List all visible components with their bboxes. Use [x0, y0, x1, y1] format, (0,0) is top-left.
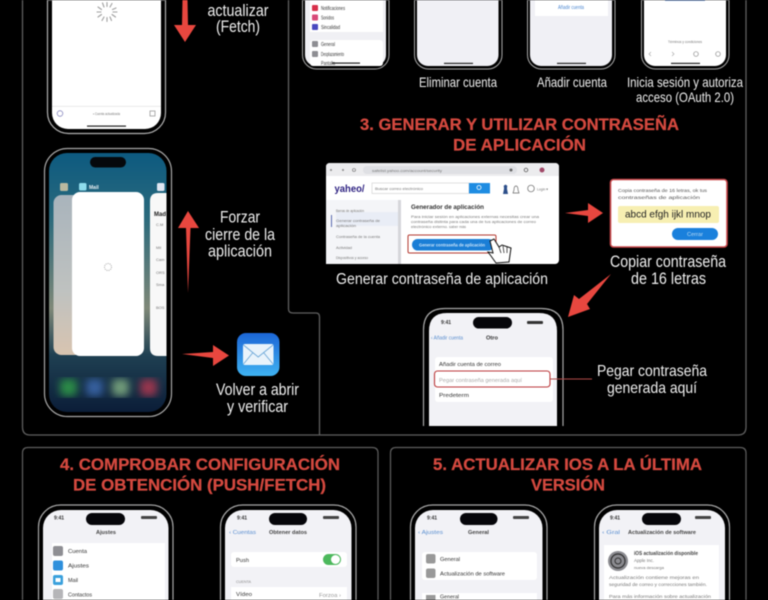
- update card: Actualización contiene mejoras en: [609, 575, 700, 580]
- app labels above the cards: [60, 183, 164, 191]
- app labels above the cards: Mail: [89, 185, 99, 191]
- update card: seguridad de correo y correcciones también.: [609, 582, 707, 587]
- arrow: to copy dialog: [565, 203, 603, 223]
- account row: Vídeo: [236, 592, 252, 598]
- settings rows: Mail: [68, 578, 78, 584]
- right app card with mail list: Sma: [156, 282, 165, 287]
- phone: app switcher: [44, 148, 172, 416]
- phone: remove account: [414, 0, 502, 69]
- label: actualizar (Fetch): actualizar: [208, 2, 269, 20]
- phone: settings: [38, 505, 173, 600]
- general rows: [422, 552, 537, 600]
- 16-letter password: abcd efgh ijkl mnop: [625, 208, 711, 220]
- phone: add account: Añadir cuenta: [558, 5, 585, 11]
- panel: copy password dialog: Copia contraseña de 16 letras, ok tus: [618, 188, 708, 193]
- centre app card with spinner: [72, 192, 144, 356]
- sidebar: Contraseña de la cuenta: [336, 234, 381, 239]
- heading: section 3: DE APLICACIÓN: [453, 136, 586, 154]
- navigation bar: Otro: [486, 336, 499, 342]
- search box: [372, 183, 490, 194]
- heading: section 3: [360, 114, 679, 154]
- phone: settings list: Notificaciones: [321, 6, 345, 12]
- icon: loading spinner: [97, 2, 117, 22]
- heading: section 4: [60, 455, 340, 494]
- account row: Forzoa ›: [319, 593, 341, 599]
- heading: section 4: 4. COMPROBAR CONFIGURACIÓN: [60, 455, 340, 474]
- label: Copiar contraseña de 16 letras: [610, 253, 727, 288]
- update card: [604, 545, 719, 600]
- search box: Buscar correo electrónico: [375, 186, 424, 191]
- close button: Cerrar: [687, 232, 703, 238]
- arrow: to paste field: [568, 274, 611, 317]
- label: Volver a abrir y verificar: [216, 381, 299, 416]
- label: Volver a abrir y verificar: y verificar: [227, 398, 288, 416]
- label: Pegar contraseña generada aquí: generada aquí: [607, 380, 697, 397]
- phone: software update: Actualización de software: [628, 530, 697, 536]
- phone: OAuth sign-in: Términos y condiciones: [668, 39, 702, 44]
- sidebar: Generar contraseña de: [336, 218, 381, 223]
- labels under section 2 phones: Añadir cuenta: [537, 74, 607, 90]
- panel: copy password dialog: [610, 180, 727, 247]
- phone: settings: Ajustes: [96, 530, 116, 536]
- main text of the page: saber más: [449, 224, 466, 229]
- phone: settings list: General: [321, 42, 335, 48]
- phone: paste password: [424, 308, 592, 426]
- right app card with mail list: Mil: [156, 245, 161, 250]
- left app card: [54, 195, 84, 355]
- arrow: reopen mail app: [182, 345, 229, 366]
- phone: settings list: Sincalidad: [321, 25, 340, 31]
- sidebar: Actividad: [336, 245, 352, 250]
- general rows: General: [440, 557, 460, 563]
- account row: [231, 587, 347, 600]
- labels under section 2 phones: acceso (OAuth 2.0): [636, 89, 734, 105]
- phone: general settings: 9:41: [427, 516, 437, 522]
- label: actualizar (Fetch): [208, 2, 269, 36]
- phone: fetch data: CUENTA: [236, 579, 251, 584]
- red highlight and connector: [434, 371, 592, 387]
- label: Generar contraseña de aplicación: Generar contraseña de aplicación: [336, 271, 548, 288]
- icon: mail app: [237, 333, 280, 376]
- update card: Apple Inc.: [634, 558, 654, 563]
- phone: fetch data: ‹ Cuentas: [229, 530, 256, 536]
- phone: paste password: 9:41: [441, 320, 451, 326]
- bottom toolbar of the inbox: • Cuenta actualizada: [93, 111, 121, 116]
- panel: section 5 update iOS: [390, 448, 746, 600]
- label: Forzar cierre de la aplicación: [205, 208, 276, 260]
- settings card: Añadir cuenta de correo: [439, 362, 501, 368]
- labels under section 2 phones: Eliminar cuenta: [419, 74, 497, 90]
- phone: settings list: Desplazamiento: [321, 52, 344, 58]
- phone: settings: 9:41: [54, 516, 64, 522]
- sidebar: Barras de aplicación: [336, 208, 364, 213]
- heading: section 3: 3. GENERAR Y UTILIZAR CONTRASEÑA: [360, 114, 679, 134]
- heading: section 4: DE OBTENCIÓN (PUSH/FETCH): [73, 476, 326, 494]
- general rows: Actualización de software: [440, 572, 505, 578]
- right app card with mail list: [150, 193, 166, 356]
- yahoo logo: yaheo/: [334, 183, 365, 195]
- label: Pegar contraseña generada aquí: [597, 363, 707, 397]
- heading: section 5: [433, 455, 702, 494]
- header icons: Login ▾: [537, 186, 548, 192]
- main text of the page: contraseña distinta para cada una de tus aplicaciones de correo: [411, 219, 537, 224]
- heading: section 5: VERSIÓN: [531, 476, 605, 494]
- phone: software update: ‹ Gral: [602, 530, 620, 536]
- sidebar: Dispositivos y acceso: [336, 255, 369, 260]
- label: Copiar contraseña de 16 letras: Copiar contraseña: [610, 253, 727, 271]
- label: Pegar contraseña generada aquí: Pegar contraseña: [597, 363, 707, 380]
- panel: Yahoo browser window: [326, 163, 559, 264]
- labels under section 2 phones: Inicia sesión y autoriza: [627, 74, 743, 90]
- phone: OAuth sign-in: [642, 0, 729, 69]
- settings card: [435, 357, 553, 402]
- label: Volver a abrir y verificar: Volver a abrir: [216, 381, 299, 399]
- phone: fetch data: 9:41: [237, 516, 247, 522]
- update card: iOS actualización disponible: [634, 551, 698, 557]
- panel: section 4 check fetch settings: [22, 448, 378, 600]
- label: Copiar contraseña de 16 letras: de 16 letras: [631, 270, 706, 288]
- navigation bar: [431, 336, 499, 342]
- header icons: [503, 184, 548, 194]
- right app card with mail list: Mad: [154, 212, 166, 218]
- labels under section 2 phones: [419, 74, 743, 105]
- phone: fetch data: [220, 505, 356, 600]
- right app card with mail list: ORS: [156, 270, 165, 275]
- dock icons blurred: [60, 379, 157, 396]
- main text of the page: electrónico externo.: [411, 224, 448, 229]
- update card: Para más información sobre actualización: [609, 594, 712, 599]
- arrow: swipe up to force close: [178, 211, 199, 293]
- right app card with mail list: Cam: [156, 257, 165, 262]
- phone: mail inbox refreshing: [48, 0, 166, 134]
- label: Forzar cierre de la aplicación: aplicación: [208, 242, 272, 260]
- sidebar: [326, 200, 401, 264]
- label: Forzar cierre de la aplicación: cierre de la: [205, 226, 276, 244]
- settings rows: Contactos: [68, 592, 92, 598]
- browser toolbar: [326, 163, 559, 176]
- phone: fetch data: Obtener datos: [269, 530, 307, 536]
- navigation bar: ‹ Añadir cuenta: [431, 336, 464, 342]
- browser toolbar: safelist.yahoo.com/account/security: [372, 168, 442, 173]
- panel: copy password dialog: contraseñas de aplicación: [618, 195, 701, 200]
- panel: outer frame of sections 1 to 3: [22, 0, 746, 435]
- settings rows: Ajustes: [68, 564, 89, 570]
- heading: section 5: 5. ACTUALIZAR IOS A LA ÚLTIMA: [433, 455, 702, 474]
- phone: settings list: [302, 0, 389, 69]
- label: actualizar (Fetch): (Fetch): [216, 18, 260, 36]
- generate button with red outline: Generar contraseña de aplicación: [419, 242, 485, 248]
- right app card with mail list: BOS: [156, 305, 165, 310]
- push toggle row: Push: [236, 558, 249, 564]
- settings rows: [53, 546, 92, 599]
- phone: general settings: General: [468, 530, 489, 536]
- main text of the page: Para iniciar sesión en aplicaciones externas necesitas crear una: [411, 214, 540, 219]
- phone: general settings: [410, 505, 547, 600]
- icon: iOS settings gear: [608, 551, 628, 571]
- phone: general settings: ‹ Ajustes: [418, 530, 443, 536]
- label: Forzar cierre de la aplicación: Forzar: [220, 208, 260, 226]
- update card: nueva descarga: [634, 565, 665, 570]
- generate button with red outline: [408, 235, 496, 253]
- sidebar: aplicación: [336, 223, 356, 228]
- settings card: Predeterm: [439, 393, 469, 399]
- icon: hand cursor: [488, 239, 511, 263]
- settings card: Pegar contraseña generada aquí: [439, 378, 522, 384]
- main text of the page: Generador de aplicación: [411, 204, 484, 211]
- section 2: account removal phones: [302, 0, 729, 69]
- settings rows: Cuenta: [68, 549, 88, 555]
- phone: add account: [528, 0, 615, 69]
- phone: software update: 9:41: [610, 516, 620, 522]
- arrow: swipe down to refresh: [174, 0, 196, 42]
- main text of the page: [411, 204, 540, 229]
- right app card with mail list: C.M: [156, 222, 163, 227]
- phone: software update: [594, 505, 730, 600]
- phone: settings list: Pantalla: [321, 61, 336, 67]
- phone: settings list: Sonidos: [321, 16, 334, 22]
